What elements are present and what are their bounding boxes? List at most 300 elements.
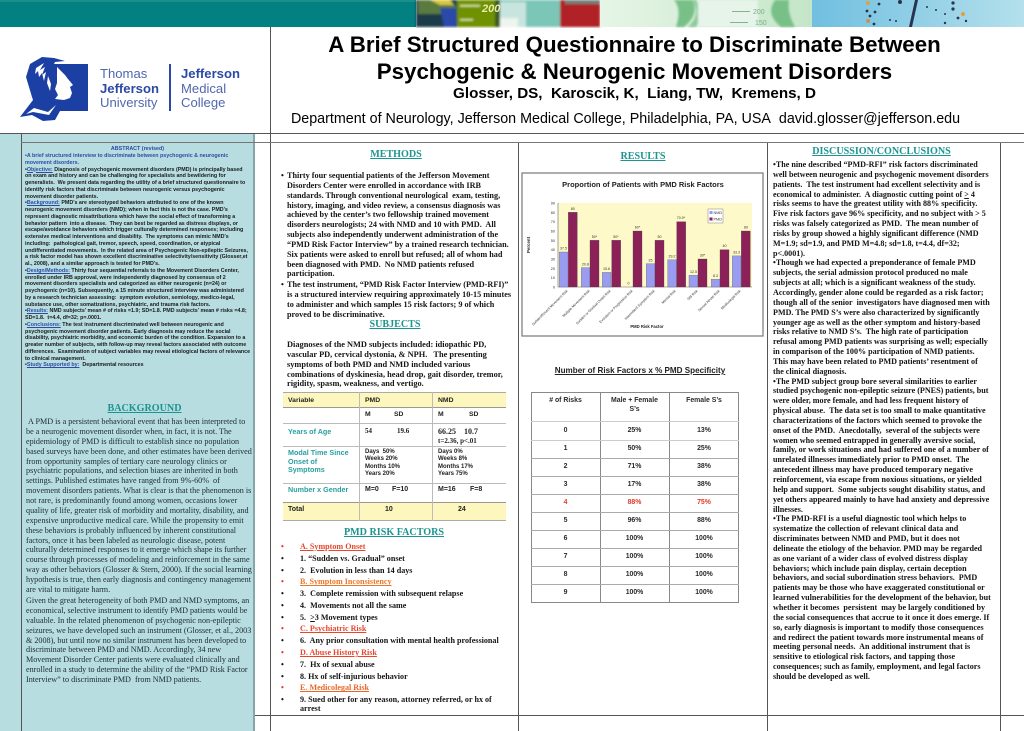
abstract text block: •Background: PMD's are stereotyped behaviors attributed to one of the known bbox=[25, 200, 224, 206]
discussion text block: M=1.9; sd=1.9, and PMD M=4.8; sd=1.8, t=4.4, df=32; bbox=[773, 239, 960, 248]
table: risk factors by specificity: 6 bbox=[564, 535, 567, 542]
background text block: are vital to mitigate harm. bbox=[26, 585, 110, 594]
y axis ticks bbox=[551, 202, 555, 290]
bar value labels: 37.5 bbox=[560, 246, 567, 250]
discussion text block: studied psychogenic non-epileptic seizure (PNES) patients, but bbox=[773, 386, 988, 395]
risk factor bullets: • bbox=[281, 566, 284, 575]
table: demographics: M bbox=[438, 410, 444, 418]
y axis ticks: 80 bbox=[551, 211, 555, 215]
table: demographics: Weeks 8% bbox=[438, 456, 467, 462]
background text block: settings. Published estimates have ranged from 9%-60% of bbox=[26, 476, 220, 485]
table: risk factors by specificity: 50% bbox=[628, 445, 641, 452]
background text block 2: Interview” to discriminate PMD from NMD patients. bbox=[26, 675, 201, 684]
risk factor list: D. Abuse History Risk bbox=[300, 648, 377, 657]
risk factor list: 7. Hx of sexual abuse bbox=[300, 660, 375, 669]
discussion text block: should be developed as well. bbox=[773, 672, 870, 681]
table: demographics: 10 bbox=[385, 506, 393, 512]
background text block 2: economical, selective instrument to identify PMD patients would be bbox=[26, 606, 247, 615]
table: risk factors by specificity: 25% bbox=[697, 445, 711, 452]
discussion text block: •The nine described “PMD-RFI” risk factors discriminated bbox=[773, 160, 978, 169]
abstract text block: enrolled under IRB approval, were independently diagnosed by consensus of 2 bbox=[25, 274, 226, 280]
number text in band: 200 bbox=[481, 3, 501, 15]
x axis category labels bbox=[531, 289, 742, 327]
table: demographics: PMD bbox=[365, 396, 380, 404]
table: demographics: t=2.36, p<.01 bbox=[438, 437, 477, 445]
abstract text block bbox=[25, 153, 250, 368]
abstract text block: al., 2008), and a similar approach is tested for PMD's. bbox=[25, 261, 160, 267]
abstract text block: SD=1.8. t=4.4, df=32; p=.0001. bbox=[25, 315, 101, 321]
subjects text: Diagnoses of the NMD subjects included: idiopathic PD, bbox=[287, 340, 486, 349]
background text block: be a neurogenic movement disorder when, in fact, it is not. The bbox=[26, 427, 232, 436]
bar chart: proportion of patients with PMD risk factors bbox=[521, 172, 764, 337]
subjects text: combinations of dyskinesia, head drop, gait disorder, tremor, bbox=[287, 370, 503, 379]
x axis category labels: Sexual Abuse Risk bbox=[697, 289, 721, 312]
discussion text block: physical abuse. The data set is too small to make quantitative bbox=[773, 406, 986, 415]
risk factor list: 9. Sued other for any reason, attorney referred, or hx of bbox=[300, 695, 492, 704]
abstract text block: movement disorders specialists and categorized as either neurogenic (n=24) or bbox=[25, 281, 226, 287]
discussion text block: learned vulnerabilities for the development of the behavior, but bbox=[773, 593, 991, 602]
y axis title: Percent bbox=[526, 236, 531, 253]
background text block: culturally determined responses to it emerge which shape its further bbox=[26, 545, 246, 554]
methods text: proved to be discriminative. bbox=[287, 310, 385, 319]
background text block 2: discriminate between PMD and NMD. Accordingly, 34 new bbox=[26, 645, 221, 654]
discussion text block: •Though we had expected a preponderance of female PMD bbox=[773, 258, 976, 267]
discussion text block: patients. The test instrument had excellent selectivity and is bbox=[773, 180, 980, 189]
discussion text block: This may have been related to PMD patients’ resentment of bbox=[773, 357, 978, 366]
risk factor bullets: • bbox=[281, 613, 284, 622]
table total row bbox=[283, 502, 506, 521]
discussion text block: consequences; such as family, employment, and legal factors bbox=[773, 662, 981, 671]
table: risk factors by specificity: 100% bbox=[695, 589, 713, 596]
abstract text block: undifferentiated movements. In the related area of Psychogenic Non-epileptic Seizures, bbox=[25, 248, 248, 254]
bar value labels: 70.0* bbox=[677, 216, 686, 220]
abstract text block: by a research technician assessing: symptom evolution, semiology, medico-legal, bbox=[25, 295, 235, 301]
background text block: not rare, is predominantly found among women, occasions lower bbox=[26, 496, 237, 505]
methods text: standards. Through conventional neurological exam, testing, bbox=[287, 191, 500, 200]
discussion text block: reinforcement, via escape from noxious situations, or yielded bbox=[773, 475, 982, 484]
bar value labels bbox=[560, 207, 748, 286]
background text block: way as other behaviors (Glosser & Stern, 2000). If the social learning bbox=[26, 565, 252, 574]
discussion text block: •The PMD-RFI is a useful diagnostic tool which helps to bbox=[773, 514, 966, 523]
abstract text block: •A brief structured interview to discriminate between psychogenic & neurogenic bbox=[25, 153, 228, 159]
heading: background: BACKGROUND bbox=[107, 403, 182, 414]
table: risk factors by specificity: 4 bbox=[564, 499, 567, 506]
abstract text block: represent diagnostic misattributions which have the social effect of transforming a bbox=[25, 214, 235, 220]
discussion text block: refusal among PMD patients was surprising as well; especially bbox=[773, 337, 988, 346]
bar value labels: 50 bbox=[658, 235, 662, 239]
top decorative photo band bbox=[0, 0, 1024, 28]
abstract text block: escape/avoidance behaviors which trigger culturally determined responses; including bbox=[25, 227, 243, 233]
table: risk factors by specificity: 100% bbox=[695, 571, 713, 578]
y axis ticks: 90 bbox=[551, 202, 555, 206]
abstract text block: including: pathological gait, tremor, speech, speed, coordination, or atypical bbox=[25, 241, 220, 247]
discussion text block: behaviors; which include pain display, certain deception bbox=[773, 564, 967, 573]
discussion text block: characterizations of the factors which seemed to provoke the bbox=[773, 416, 982, 425]
background text block: A PMD is a persistent behavioral event that has been interpreted to bbox=[28, 417, 245, 426]
background text block 2: seizures, we have developed such an instrument (Glosser, et al., 2003 bbox=[26, 626, 251, 635]
table: demographics: Years 75% bbox=[438, 471, 468, 477]
icon: Jefferson profile silhouette bbox=[20, 57, 88, 121]
row: modal time since onset: Modal Time Since bbox=[288, 448, 349, 457]
risk factor bullets: • bbox=[281, 672, 284, 681]
table: demographics: Weeks 20% bbox=[365, 456, 398, 462]
logo text right bbox=[181, 66, 240, 110]
risk factor list: 5. >3 Movement types bbox=[300, 613, 378, 622]
heading: specificity table title: Number of Risk Factors x % PMD Specificity bbox=[555, 366, 725, 375]
methods text: Six patients were asked to enroll but refused; all of whom had bbox=[287, 250, 502, 259]
bar value labels: 12.5 bbox=[690, 270, 697, 274]
subjects text: rigidity, spasm, weakness, and vertigo. bbox=[287, 379, 424, 388]
table: risk factors by specificity: 100% bbox=[626, 553, 643, 560]
bar value labels: 60* bbox=[635, 226, 641, 230]
methods text: Thirty four sequential patients of the Jefferson Movement bbox=[287, 171, 489, 180]
heading: subjects: SUBJECTS bbox=[369, 319, 421, 330]
background text block: quality of life, greater risk of morbidity and mortality, disability, and bbox=[26, 506, 249, 515]
abstract text block: generalists. We present data regarding the utility of a brief structured questionnaire to bbox=[25, 180, 245, 186]
logo text right: Jefferson bbox=[181, 66, 240, 81]
background text block: movement disorders patients. What is clear is that the phenomenon is bbox=[26, 486, 251, 495]
subjects text bbox=[287, 340, 503, 388]
row: number by gender: Number x Gender bbox=[288, 484, 348, 494]
risk factor bullets: • bbox=[281, 589, 284, 598]
y axis ticks: 70 bbox=[551, 220, 555, 224]
discussion text block: onset of the PMD. Anecdotally, several of the subjects were bbox=[773, 426, 980, 435]
abstract text block: on exam and history and can be challenging for specialists and bewildering for bbox=[25, 173, 226, 179]
subjects text: symptoms of both PMD and NMD included various bbox=[287, 360, 470, 369]
discussion text block: subjects at all; which is a significant weakness of the study. bbox=[773, 278, 976, 287]
background text block: these behaviors is probably influenced by inherent constitutional bbox=[26, 526, 236, 535]
abstract text block: psychogenic (n=10). Subsequently, a 15 minute structured interview was administered bbox=[25, 288, 244, 294]
abstract text block: identify risk factors that discriminate between neurogenic versus psychogenic bbox=[25, 187, 225, 193]
table: demographics: 66.25 10.7 bbox=[438, 426, 478, 436]
table column headers: # of Risks bbox=[549, 397, 582, 404]
background text block 2: Movement Disorder Center patients were evaluated clinically and bbox=[26, 655, 240, 664]
x axis category labels: Sudden or Gradual Onset Risk bbox=[575, 289, 612, 325]
table: risk factors by specificity: 96% bbox=[628, 517, 641, 524]
methods text: participation. bbox=[287, 269, 335, 278]
plot area bbox=[558, 203, 752, 287]
methods text: “PMD Risk Factor Interview” by a trained research technician. bbox=[287, 240, 509, 249]
table: demographics: 54 bbox=[365, 426, 372, 434]
table: risk factors by specificity: 88% bbox=[628, 499, 641, 506]
risk factor bullets: • bbox=[281, 660, 284, 669]
risk factor bullets: • bbox=[281, 577, 284, 586]
table: risk factors by specificity: 100% bbox=[626, 535, 643, 542]
x axis title: PMD Risk Factor bbox=[630, 324, 664, 329]
logo text left bbox=[100, 66, 159, 110]
abstract text block: differences. Examination of subject variables may reveal etiological factors of relevance bbox=[25, 349, 250, 355]
abstract text block: •Objective: Diagnosis of psychogenic movement disorders (PMD) is principally based bbox=[25, 166, 242, 172]
table: risk factors by specificity: 75% bbox=[697, 499, 711, 506]
risk factor last line: arrest bbox=[300, 704, 321, 713]
table: risk factors by specificity: 1 bbox=[564, 445, 567, 452]
risk factor list: 4. Movements not all the same bbox=[300, 601, 406, 610]
table: risk factors by specificity: 38% bbox=[697, 481, 711, 488]
title: A Brief Structured Questionnaire to Discriminate Between bbox=[328, 32, 941, 57]
risk factor bullets: • bbox=[281, 695, 284, 704]
heading: discussion/conclusions: DISCUSSION/CONCLUSIONS bbox=[812, 146, 951, 157]
bar value labels: 50* bbox=[592, 235, 598, 239]
bar value labels: 50* bbox=[613, 235, 619, 239]
discussion text block: p<.0001). bbox=[773, 249, 805, 258]
background text block 2: & 2008), but until now no similar instrument has been developed to bbox=[26, 636, 246, 644]
table: risk factors by specificity: 2 bbox=[564, 463, 567, 470]
table: risk factors by specificity: Male + Female bbox=[611, 397, 658, 404]
table: demographics: SD bbox=[469, 410, 478, 418]
methods text: disorders neurologists; 24 with NMD and 10 with PMD. All bbox=[287, 220, 496, 229]
background text block: course through processes of modeling and reinforcement in the same bbox=[26, 555, 250, 564]
risk factor list: E. Medicolegal Risk bbox=[300, 683, 369, 692]
background text block: hypothesis is true, then early diagnosis and contingency management bbox=[26, 575, 251, 584]
risk factor bullets: • bbox=[281, 542, 284, 551]
bar value labels: 80 bbox=[571, 207, 575, 211]
abstract text block: psychogenic movement disorder patients. Early diagnosis may reduce the social bbox=[25, 328, 231, 334]
abstract text block: behavior pattern into a disease. They can best be regarded as distress displays, or bbox=[25, 220, 238, 226]
chart legend: PMD bbox=[714, 218, 722, 222]
discussion text block: discriminates between NMD and PMD, but it does not bbox=[773, 534, 960, 543]
methods text: Disorders Center were enrolled in accordance with IRB bbox=[287, 181, 481, 190]
risk factor list: 8. Hx of self-injurious behavior bbox=[300, 672, 408, 681]
risk factor list: 6. Any prior consultation with mental health professional bbox=[300, 636, 499, 645]
risk factor bullets: • bbox=[281, 554, 284, 563]
table header row bbox=[283, 392, 506, 407]
background text block: based surveys have been done, and other estimates have been derived bbox=[26, 447, 252, 456]
discussion text block bbox=[773, 160, 991, 681]
top decorative photo band: 200 bbox=[753, 9, 765, 16]
table: demographics: Years 20% bbox=[365, 471, 395, 477]
discussion text block: whether it becomes persistent may be largely conditioned by bbox=[773, 603, 985, 612]
risk factor bullets: • bbox=[281, 648, 284, 657]
table rows: 0 bbox=[564, 427, 567, 434]
risk factor bullets: • bbox=[281, 624, 284, 633]
logo text left: Jefferson bbox=[100, 81, 159, 96]
bar value labels: 0 bbox=[628, 282, 630, 286]
y axis ticks: 50 bbox=[551, 239, 555, 243]
column labels: Variable bbox=[288, 396, 314, 404]
methods text: achieved by the center’s two fellowship trained movement bbox=[287, 210, 489, 219]
table: demographics: NMD bbox=[438, 396, 453, 404]
discussion text block: the social consequences that accrue to it once it does emerge. If bbox=[773, 613, 989, 622]
subjects text: vascular PD, cervical dystonia, & NPH. The presenting bbox=[287, 350, 487, 359]
abstract text block: to clinical management. bbox=[25, 356, 86, 362]
risk factor list: 1. “Sudden vs. Gradual” onset bbox=[300, 554, 405, 563]
discussion text block: economical to administer. A diagnostic cutting point of > 4 bbox=[773, 190, 975, 199]
bar value labels: 25 bbox=[648, 258, 652, 262]
discussion text block: risks by group showed a highly significant difference (NMD bbox=[773, 229, 979, 238]
table: risk factors by specificity: 9 bbox=[564, 589, 567, 596]
discussion text block: systematize the collection of relevant clinical data and bbox=[773, 524, 958, 533]
table: demographics: M bbox=[365, 410, 371, 418]
table: risk factors by specificity bbox=[531, 392, 739, 603]
background text block 2: enrolled in a study to determine the ability of the “PMD Risk Factor bbox=[26, 665, 248, 674]
abstract text block: disability, psychiatric morbidity, and economic burden of the condition. Expansion to a bbox=[25, 335, 245, 341]
table: demographics: F=8 bbox=[470, 486, 482, 492]
table: risk factors by specificity: 25% bbox=[628, 427, 641, 434]
abstract text block: substance use, other somatizations, psychiatric, and trauma risk factors. bbox=[25, 302, 210, 308]
risk factor list: 2. Evolution in less than 14 days bbox=[300, 566, 412, 575]
background text block 2: valuable. In the related phenomenon of psychogenic non-epileptic bbox=[26, 616, 241, 625]
chart legend bbox=[708, 209, 723, 223]
discussion text block: Five risk factors gave 96% specificity, and no subject with > 5 bbox=[773, 209, 986, 218]
discussion text block: so, early diagnosis is important to modify those consequences bbox=[773, 623, 984, 632]
discussion text block: subjects, the serial admission protocol produced no male bbox=[773, 268, 968, 277]
table: risk factors by specificity: 71% bbox=[628, 463, 641, 470]
methods text: is a structured interview requiring approximately 10-15 minutes bbox=[287, 290, 511, 299]
bar value labels: 60 bbox=[744, 226, 748, 230]
discussion text block: risks relative to NMD S’s. The high rate of participation bbox=[773, 327, 968, 336]
panel: left column background bbox=[0, 134, 253, 731]
row: modal time since onset: Symptoms bbox=[288, 465, 325, 474]
x axis category labels: Evolution or Progressive Risk bbox=[599, 289, 634, 324]
abstract text block: •Design/Methods: Thirty four sequential referrals to the Movement Disorders Center, bbox=[25, 268, 239, 274]
table: demographics: Months 17% bbox=[438, 464, 473, 470]
discussion text block: well between neurogenic and psychogenic movement disorders bbox=[773, 170, 989, 179]
risk factor list: B. Symptom Inconsistency bbox=[300, 577, 392, 586]
discussion text block: though all of the senior investigators have diagnosed men with bbox=[773, 298, 990, 307]
methods text: history, imaging, and video review, a consensus diagnosis was bbox=[287, 201, 500, 210]
logo vertical divider bbox=[169, 64, 171, 111]
risk factor bullets: • bbox=[281, 636, 284, 645]
discussion text block: unrelated illnesses immediately prior to PMD onset. The bbox=[773, 455, 969, 464]
top decorative photo band: 150 bbox=[755, 20, 767, 27]
affiliation: Department of Neurology, Jefferson Medical College, Philadelphia, PA, USA david.glosser@jefferson.edu bbox=[291, 111, 960, 127]
discussion text block: sensitive to etiological risk factors, and tapping those bbox=[773, 652, 955, 661]
abstract heading: ABSTRACT (revised) bbox=[111, 146, 164, 152]
discussion text block: younger age as well as the other symptom and history-based bbox=[773, 318, 980, 326]
abstract text block: •Study Supported by: Departmental resources bbox=[25, 362, 144, 368]
x axis category labels: SIB Risk bbox=[686, 289, 699, 301]
table: demographics: M=0 bbox=[365, 486, 379, 492]
discussion text block: yet others appeared mainly to have had anxiety and depressive bbox=[773, 495, 989, 504]
table: risk factors by specificity: 100% bbox=[626, 571, 643, 578]
discussion text block: help and support. Some subjects sought disability status, and bbox=[773, 485, 985, 494]
x axis category labels: Sudden/Recent Movement Risk bbox=[531, 289, 569, 327]
bar value labels: 29.2 bbox=[668, 254, 676, 258]
table: risk factors by specificity: 88% bbox=[697, 517, 711, 524]
row: total: Total bbox=[288, 506, 304, 512]
bar value labels: 30* bbox=[700, 254, 706, 258]
discussion text block: as one variant of a wider class of evolved distress display bbox=[773, 554, 968, 563]
authors: Glosser, DS, Karoscik, K, Liang, TW, Kremens, D bbox=[453, 85, 816, 102]
bar value labels: 20.8 bbox=[582, 262, 589, 266]
table: risk factors by specificity: 5 bbox=[564, 517, 567, 524]
table: risk factors by specificity: 8 bbox=[564, 571, 567, 578]
table: risk factors by specificity: 3 bbox=[564, 481, 567, 488]
table: demographics: F=10 bbox=[392, 486, 408, 492]
discussion text block: risks was falsely categorized as PMD. The mean number of bbox=[773, 219, 978, 228]
discussion text block: behaviors, and social subordination stress behaviors. PMD bbox=[773, 573, 977, 582]
abstract text block: movement disorders. bbox=[25, 160, 79, 166]
discussion text block: and redirect the patient towards more instrumental means of bbox=[773, 632, 983, 642]
discussion text block: antecedent illness may have produced temporary negative bbox=[773, 465, 973, 474]
discussion text block: in comparison of the 100% participation of NMD patients. bbox=[773, 347, 975, 356]
discussion text block: illnesses. bbox=[773, 505, 803, 514]
discussion text block: •The PMD subject group bore several similarities to earlier bbox=[773, 377, 977, 386]
table: risk factors by specificity: 100% bbox=[695, 553, 713, 560]
abstract text block: movement disorder patients. bbox=[25, 194, 98, 200]
background text block: psychiatric populations, and selection biases are inherited in both bbox=[26, 466, 238, 475]
table: risk factors by specificity: S’s bbox=[629, 406, 640, 413]
background text block 2 bbox=[26, 596, 251, 684]
y axis ticks: 60 bbox=[551, 230, 555, 234]
table: risk factors by specificity: Female S’s bbox=[686, 397, 722, 404]
discussion text block: patients may be those who have exaggerated constitutional or bbox=[773, 583, 985, 592]
table: demographics: Days 0% bbox=[438, 449, 463, 455]
y axis ticks: 0 bbox=[553, 286, 555, 290]
NMD bars bbox=[559, 252, 741, 287]
table: demographics bbox=[283, 392, 506, 521]
risk factor list bbox=[300, 542, 499, 704]
discussion text block: PMD. The PMD S’s were also characterized by significantly bbox=[773, 308, 979, 317]
discussion text block: were older, more female, and had less frequent history of bbox=[773, 396, 969, 405]
heading: methods: METHODS bbox=[370, 149, 422, 160]
abstract text block: •Conclusions: The test instrument discriminated well between neurogenic and bbox=[25, 322, 224, 328]
row: modal time since onset: Onset of bbox=[288, 457, 317, 466]
table: demographics: SD bbox=[394, 410, 403, 418]
bar value labels: 33.3 bbox=[733, 250, 740, 254]
abstract text block: •Results: NMD subjects' mean # of risks =1.9; SD=1.8. PMD subjects' mean # risks =4.8; bbox=[25, 308, 247, 314]
table: risk factors by specificity: 17% bbox=[628, 481, 641, 488]
abstract text block: neurogenic movement disorders (NMD); when in fact this is not the case. PMD's bbox=[25, 207, 228, 213]
background text block: epidemiology of PMD is difficult to establish since no population bbox=[26, 437, 239, 446]
discussion text block: Accordingly, gender alone could be regarded as a risk factor; bbox=[773, 288, 984, 297]
abstract text block: extensive medical interventions and disability. The symptoms can mimic NMD's bbox=[25, 234, 229, 240]
table: risk factors by specificity: 100% bbox=[695, 535, 713, 542]
methods text bbox=[287, 171, 511, 319]
methods text: subjects also independently underwent administration of the bbox=[287, 230, 498, 239]
discussion text block: meeting personal needs. An additional instrument that is bbox=[773, 642, 970, 651]
x axis category labels: Intermittent Symptom Risk bbox=[624, 289, 656, 321]
table: demographics: 24 bbox=[458, 506, 466, 512]
table: risk factors by specificity: 100% bbox=[626, 589, 643, 596]
risk factor bullets bbox=[281, 542, 284, 704]
bar value labels: 8.3 bbox=[713, 274, 718, 278]
background text block 2: Given the great heterogeneity of both PMD and NMD symptoms, an bbox=[26, 596, 249, 605]
logo text right: College bbox=[181, 95, 225, 110]
row: years of age: Years of Age bbox=[288, 426, 331, 436]
risk factor bullets: • bbox=[281, 683, 284, 692]
logo text left: Thomas bbox=[100, 66, 148, 81]
abstract text block: a risk factor model has shown excellent discriminative selectivity/sensitivity (Glosser,et bbox=[25, 254, 247, 260]
logo: Thomas Jefferson University and Jefferson Medical College bbox=[20, 57, 240, 121]
bar value labels: 15.6 bbox=[603, 267, 610, 271]
risk factor list: A. Symptom Onset bbox=[300, 542, 365, 551]
background text block: expensive unproductive medical care. While the propensity to emit bbox=[26, 516, 244, 525]
chart title: Proportion of Patients with PMD Risk Factors bbox=[562, 180, 724, 189]
y axis ticks: 40 bbox=[551, 248, 555, 252]
background text block bbox=[26, 417, 252, 594]
discussion text block: risks seems to have the greatest utility with 88% specificity. bbox=[773, 199, 977, 208]
heading: results: RESULTS bbox=[620, 151, 666, 162]
risk factor bullets: • bbox=[281, 601, 284, 610]
y axis ticks: 30 bbox=[551, 258, 555, 262]
discussion text block: family, or work situations and had suffered one of a number of bbox=[773, 445, 989, 454]
methods text: The test instrument, “PMD Risk Factor Interview (PMD-RFI)” bbox=[287, 280, 508, 289]
bar value labels: 40 bbox=[722, 244, 726, 248]
background text block: from opportunity samples of tertiary care neurology clinics or bbox=[26, 456, 227, 466]
PMD bars bbox=[568, 212, 750, 287]
discussion text block: delineate the etiology of the behavior. PMD may be regarded bbox=[773, 544, 982, 553]
heading: PMD risk factors: PMD RISK FACTORS bbox=[344, 527, 444, 538]
background text block: factors, once it has been labeled as neurologic disease, potent bbox=[26, 536, 225, 544]
methods bullets: • bbox=[281, 171, 284, 180]
methods text: been diagnosed with PMD. No NMD patients refused bbox=[287, 260, 474, 269]
table: risk factors by specificity: 38% bbox=[697, 463, 711, 470]
table: risk factors by specificity: 7 bbox=[564, 553, 567, 560]
risk factor list: 3. Complete remission with subsequent relapse bbox=[300, 589, 463, 598]
discussion text block: women who seemed entrapped in generally aversive social, bbox=[773, 436, 975, 445]
methods text: to administer and which samples 15 risk factors; 9 of which bbox=[287, 300, 494, 309]
